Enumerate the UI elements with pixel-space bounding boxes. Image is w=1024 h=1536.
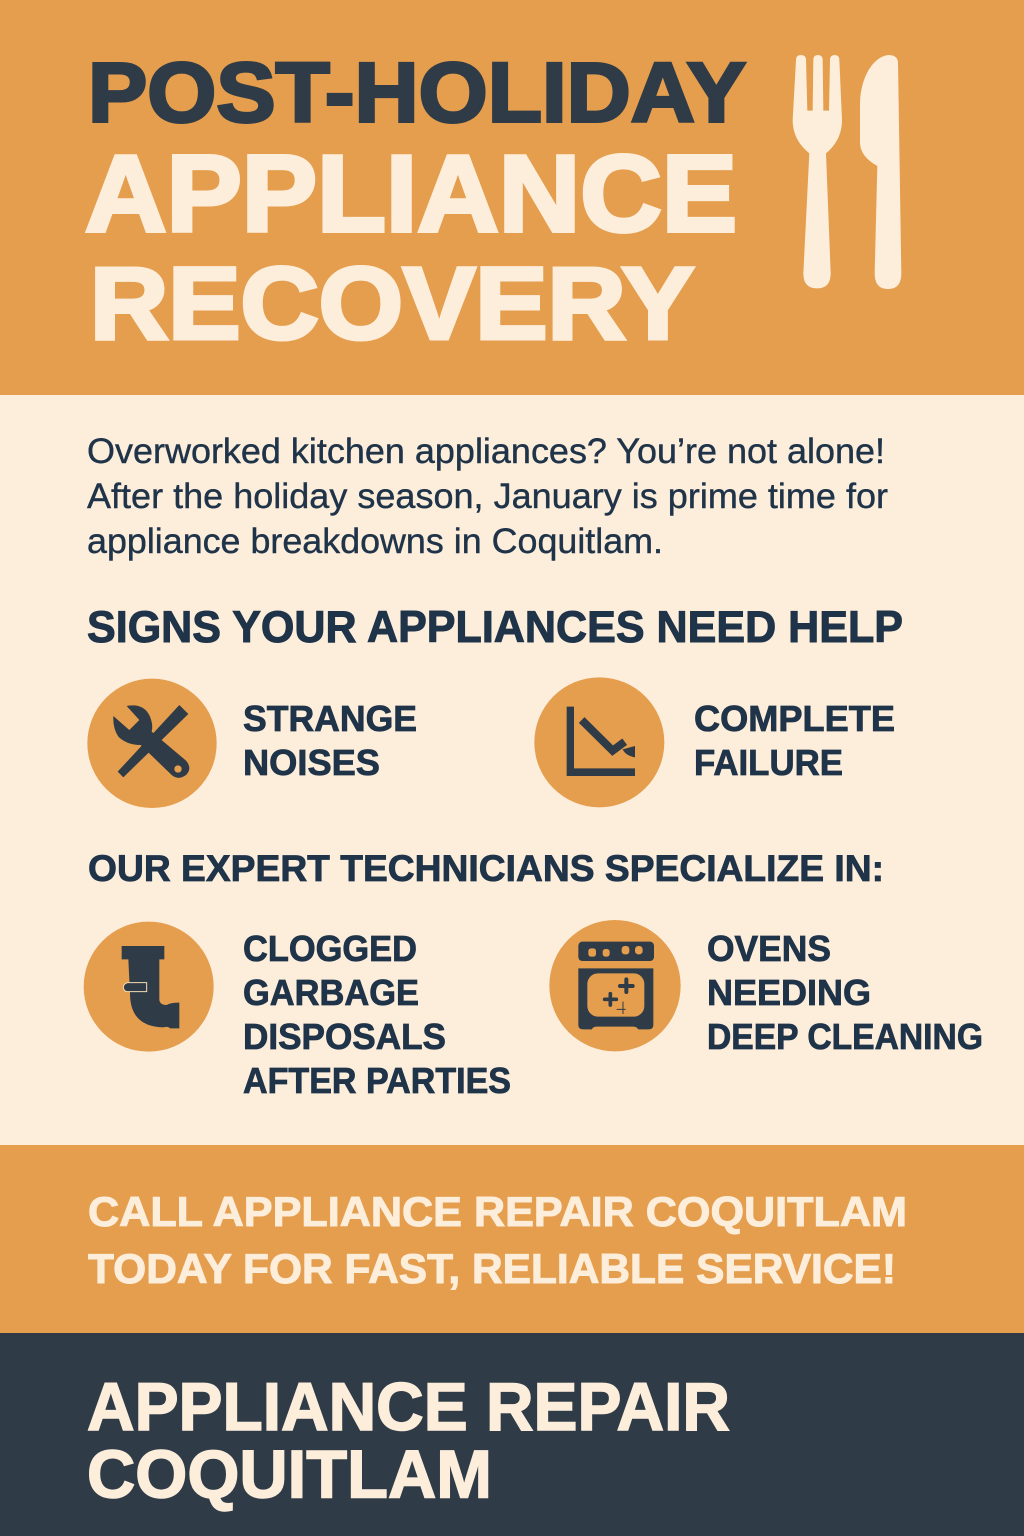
label <box>694 698 895 783</box>
title <box>85 46 746 360</box>
label <box>707 928 983 1057</box>
panel: call to action <box>0 1145 1024 1333</box>
label: OVENS <box>707 928 831 969</box>
label: CLOGGED <box>243 928 417 969</box>
label <box>243 928 511 1101</box>
heading: specialties: OUR EXPERT TECHNICIANS SPECIALIZE IN: <box>88 848 884 889</box>
icon: wrench and screwdriver <box>87 679 217 808</box>
icon: fork and knife <box>793 55 901 289</box>
label: AFTER PARTIES <box>243 1060 511 1101</box>
icon: pipe <box>84 922 214 1052</box>
label: FAILURE <box>694 742 843 783</box>
heading: signs: SIGNS YOUR APPLIANCES NEED HELP <box>87 603 903 652</box>
specialty: garbage disposals <box>84 922 511 1101</box>
label: NOISES <box>243 742 380 783</box>
specialty: ovens <box>549 920 983 1057</box>
call to action text: TODAY FOR FAST, RELIABLE SERVICE! <box>88 1245 896 1292</box>
sign: strange noises <box>87 679 417 808</box>
intro text: Overworked kitchen appliances? You’re not alone! <box>87 432 885 471</box>
label: DEEP CLEANING <box>707 1016 983 1057</box>
company name: COQUITLAM <box>87 1438 492 1512</box>
label: DISPOSALS <box>243 1016 446 1057</box>
label: COMPLETE <box>694 698 895 739</box>
company name <box>87 1370 730 1512</box>
intro text: appliance breakdowns in Coquitlam. <box>87 522 663 561</box>
title: APPLIANCE <box>85 133 737 255</box>
call to action text: CALL APPLIANCE REPAIR COQUITLAM <box>88 1188 907 1235</box>
title: RECOVERY <box>90 246 694 360</box>
company name: APPLIANCE REPAIR <box>87 1370 730 1445</box>
icon: declining chart <box>534 677 664 807</box>
panel: main content <box>0 395 1024 1145</box>
intro text: After the holiday season, January is prime time for <box>87 477 888 516</box>
call to action text <box>88 1188 907 1292</box>
icon: oven <box>549 920 681 1051</box>
panel: header <box>0 0 1024 395</box>
intro text <box>87 432 888 561</box>
label <box>243 698 417 783</box>
label: GARBAGE <box>243 972 419 1013</box>
sign: complete failure <box>534 677 895 807</box>
label: STRANGE <box>243 698 417 739</box>
title: POST-HOLIDAY <box>88 46 746 140</box>
panel: footer <box>0 1333 1024 1536</box>
label: NEEDING <box>707 972 871 1013</box>
